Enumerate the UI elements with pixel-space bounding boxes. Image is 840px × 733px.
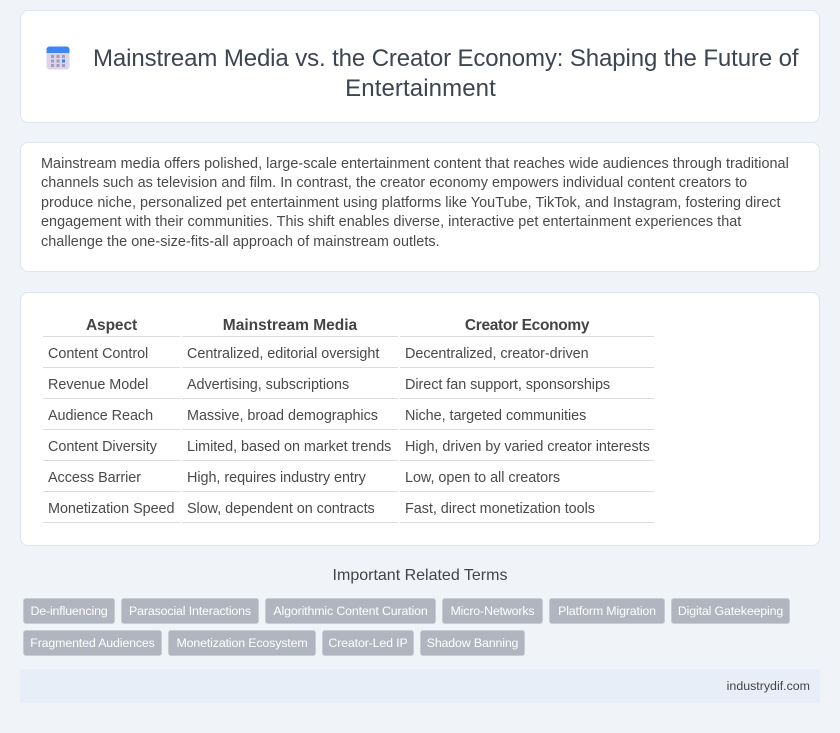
table: Creator Economy [465,317,589,334]
table: Centralized, editorial oversight [187,346,379,362]
table: Mainstream Media [223,317,357,334]
table: Monetization Speed [48,501,174,517]
title [93,45,799,102]
footer source: industrydif.com [727,679,810,693]
table: Revenue Model [48,377,148,393]
icon: calendar [46,46,70,70]
tags: Shadow Banning [427,636,518,650]
tags: Algorithmic Content Curation [273,604,428,618]
title card [20,10,820,123]
table: Massive, broad demographics [187,408,378,424]
title: Entertainment [345,75,496,102]
tags [23,598,790,656]
summary text: challenge the one-size-fits-all approach of mainstream outlets. [41,234,440,250]
table [43,317,654,523]
table: Slow, dependent on contracts [187,501,375,517]
summary text: produce niche, personalized pet entertainment using platforms like YouTube, TikTok, and Instagram, fostering direct [41,194,781,210]
panel: summary [20,142,820,272]
panel: comparison table [20,292,820,546]
table: Decentralized, creator-driven [405,346,589,362]
table: Fast, direct monetization tools [405,501,595,517]
table: High, requires industry entry [187,470,366,486]
table: Direct fan support, sponsorships [405,377,610,393]
tags: Monetization Ecosystem [176,636,308,650]
table: Content Diversity [48,439,157,455]
table: Advertising, subscriptions [187,377,349,393]
tags: Creator-Led IP [328,636,408,650]
table: Access Barrier [48,470,141,486]
title: Mainstream Media vs. the Creator Economy: Shaping the Future of [93,45,798,72]
summary text [41,156,789,250]
table: Niche, targeted communities [405,408,586,424]
table: Audience Reach [48,408,153,424]
table: Limited, based on market trends [187,439,391,455]
heading: related terms: Important Related Terms [333,567,507,584]
summary text: engagement with their communities. This shift enables diverse, interactive pet entertainment experiences that [41,214,741,230]
table: Content Control [48,346,148,362]
table: Low, open to all creators [405,470,560,486]
tags: Platform Migration [558,604,656,618]
tags: Micro-Networks [451,604,534,618]
tags: Fragmented Audiences [30,636,155,650]
summary text: channels such as television and film. In contrast, the creator economy empowers individual content creators to [41,175,747,191]
table: High, driven by varied creator interests [405,439,650,455]
summary text: Mainstream media offers polished, large-scale entertainment content that reaches wide audiences through traditional [41,156,789,172]
tags: Digital Gatekeeping [678,604,783,618]
table: Aspect [86,317,137,334]
tags: De-influencing [30,604,108,618]
footer bar [20,669,820,703]
tags: Parasocial Interactions [129,604,251,618]
